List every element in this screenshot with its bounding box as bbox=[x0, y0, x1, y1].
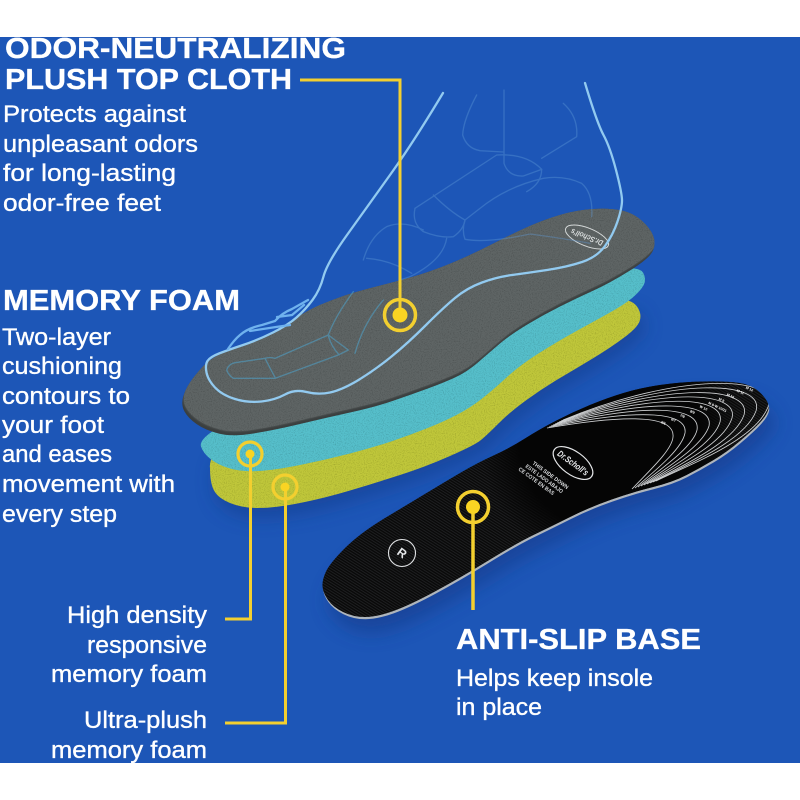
text: high density foam label: memory foam bbox=[51, 661, 207, 688]
text: memory foam description: every step bbox=[2, 501, 117, 528]
size labels: 8/9 bbox=[689, 409, 696, 415]
heading: odor-neutralizing plush top cloth: ODOR-NEUTRALIZING bbox=[5, 33, 346, 65]
Dr. Scholl's logo bbox=[548, 440, 598, 486]
illustration: anti-slip black base insole bbox=[322, 381, 776, 637]
text: high density foam label: High density bbox=[67, 602, 207, 629]
illustration: layered insole bbox=[182, 83, 656, 518]
text: ultra-plush foam label: memory foam bbox=[51, 737, 207, 764]
print instructions: CE COTE EN BAS bbox=[517, 467, 555, 497]
callout: anti-slip base leader bbox=[458, 492, 488, 610]
text: top cloth description: odor-free feet bbox=[3, 190, 161, 217]
callout: ultra-plush foam leader bbox=[225, 475, 297, 723]
text: memory foam description: cushioning bbox=[2, 353, 122, 380]
size labels: M 12 bbox=[745, 386, 754, 393]
text: top cloth description: unpleasant odors bbox=[3, 131, 198, 158]
text: top cloth description: Protects against bbox=[3, 101, 186, 128]
foot bone sketch: ankle and midfoot bbox=[363, 90, 592, 280]
size trim lines bbox=[547, 383, 769, 489]
callout: top cloth leader bbox=[300, 80, 416, 330]
text: anti-slip description: in place bbox=[456, 694, 542, 721]
size labels: M 8-W 10/11 bbox=[708, 401, 727, 413]
text: memory foam description: movement with bbox=[2, 471, 175, 498]
size labels: 6/7 bbox=[670, 417, 677, 423]
text: anti-slip description bbox=[456, 665, 653, 721]
text: ultra-plush foam label bbox=[51, 707, 207, 764]
text: top cloth description: for long-lasting bbox=[3, 160, 176, 187]
text: memory foam description bbox=[2, 324, 175, 528]
logo on grey insole bbox=[562, 220, 612, 254]
callout: high density foam leader bbox=[225, 442, 262, 619]
text: high density foam label: responsive bbox=[87, 632, 207, 659]
right-foot marker bbox=[388, 540, 416, 566]
foot outline bbox=[206, 83, 622, 402]
heading: memory foam: MEMORY FOAM bbox=[3, 285, 240, 317]
text: ultra-plush foam label: Ultra-plush bbox=[84, 707, 207, 734]
right-foot marker: R bbox=[394, 545, 410, 561]
text: high density foam label bbox=[51, 602, 207, 688]
Dr. Scholl's logo: Dr.Scholl's bbox=[555, 448, 591, 478]
text: memory foam description: and eases bbox=[2, 441, 112, 468]
text: memory foam description: Two-layer bbox=[2, 324, 111, 351]
size labels bbox=[660, 386, 754, 426]
teal foam layer bbox=[201, 268, 645, 471]
grey plush top cloth layer bbox=[182, 205, 656, 435]
print instructions: THIS SIDE DOWN bbox=[531, 461, 569, 491]
text: memory foam description: your foot bbox=[2, 412, 104, 439]
text: anti-slip description: Helps keep insole bbox=[456, 665, 653, 692]
logo on grey insole: Dr.Scholl's bbox=[569, 226, 604, 248]
heading: odor-neutralizing plush top cloth bbox=[5, 33, 346, 96]
size labels: M 10 bbox=[726, 393, 735, 400]
text: memory foam description: contours to bbox=[2, 383, 130, 410]
size labels: 5/6 bbox=[660, 420, 667, 426]
yellow foam layer bbox=[210, 300, 644, 518]
size labels: M 11 bbox=[736, 389, 745, 396]
size labels: W 10 bbox=[699, 405, 708, 412]
size labels: M 9 bbox=[718, 397, 725, 403]
foot bone sketch: forefoot bbox=[227, 292, 383, 378]
heading: anti-slip base: ANTI-SLIP BASE bbox=[456, 624, 701, 656]
print instructions: ESTE LADO ABAJO bbox=[524, 464, 564, 495]
heading: odor-neutralizing plush top cloth: PLUSH TOP CLOTH bbox=[5, 64, 292, 96]
text: top cloth description bbox=[3, 101, 198, 217]
size labels: 7/8 bbox=[679, 413, 686, 419]
